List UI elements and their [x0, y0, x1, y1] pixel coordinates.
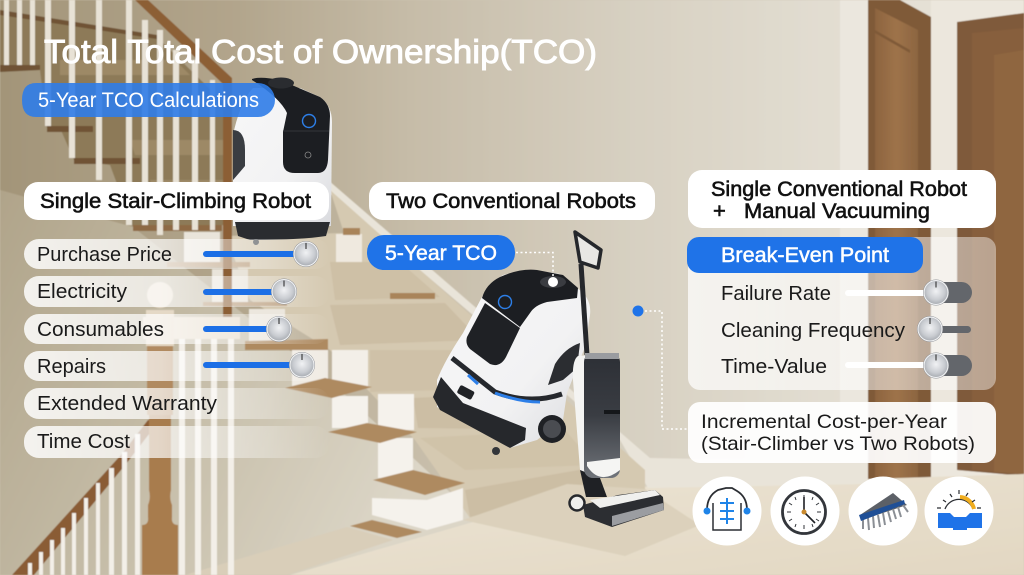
row: Extended Warranty [24, 388, 330, 419]
white risers and wood step noses [133, 225, 465, 538]
icon: brush roller [848, 476, 918, 546]
text box: incremental cost-per-year [688, 402, 996, 463]
heading: Single Conventional Robot + Manual Vacuuming: + Manual Vacuuming [713, 200, 930, 223]
right door [957, 13, 1024, 476]
heading: Two Conventional Robots: Two Conventional Robots [386, 190, 636, 213]
callout line: 5-Year TCO to robot [516, 252, 558, 287]
heading: Two Conventional Robots [369, 182, 655, 220]
heading: Single Conventional Robot + Manual Vacuuming [688, 170, 996, 228]
upper handrail [135, 0, 232, 318]
icon: clock [770, 476, 840, 546]
row: Purchase Price [24, 239, 330, 269]
pill: 5-Year TCO [367, 235, 515, 270]
robot: stair-climbing robot at top of stairs [233, 78, 332, 245]
pill: 5-Year TCO Calculations [22, 83, 275, 117]
hallway floor [270, 474, 1024, 575]
upper stairs with carpet [0, 13, 226, 227]
wall between doors [931, 0, 1024, 482]
right wall column [840, 0, 868, 482]
pill: 5-Year TCO: 5-Year TCO [385, 241, 497, 265]
icon: house with breaker [692, 476, 762, 546]
robot: stair-climbing robot on steps [433, 270, 590, 455]
row: Electricity: Electricity [37, 281, 127, 303]
row: Consumables: Consumables [37, 319, 164, 341]
lower handrail [12, 420, 160, 575]
text box: incremental cost-per-year: Incremental Cost-per-Year [701, 411, 948, 433]
heading: Single Conventional Robot + Manual Vacuuming: Single Conventional Robot [711, 178, 967, 201]
rug [463, 484, 700, 556]
pill: 5-Year TCO Calculations: 5-Year TCO Calculations [38, 89, 259, 112]
panel: break-even point [687, 237, 996, 390]
row: Electricity [24, 276, 330, 307]
newel post [142, 282, 240, 575]
row: Extended Warranty: Extended Warranty [37, 393, 217, 415]
panel: break-even point: Failure Rate [721, 283, 831, 305]
text box: incremental cost-per-year: (Stair-Climber vs Two Robots) [701, 433, 975, 455]
baseboard [328, 180, 868, 488]
callout line: blue dot to incremental cost [632, 306, 688, 429]
upper balusters [4, 0, 215, 235]
lower balusters [28, 338, 234, 575]
stick vacuum [570, 232, 664, 527]
title: Total Total Cost of Ownership(TCO) [44, 33, 597, 70]
heading: Single Stair-Climbing Robot: Single Stair-Climbing Robot [40, 190, 311, 213]
panel: break-even point: Break-Even Point [721, 244, 889, 267]
row: Time Cost: Time Cost [37, 431, 130, 453]
row: Repairs [24, 351, 330, 381]
panel: break-even point: Time-Value [721, 356, 827, 378]
bottom stair carpet [185, 527, 393, 575]
row: Time Cost [24, 426, 330, 458]
left door [868, 0, 931, 482]
panel: break-even point: Cleaning Frequency [721, 320, 905, 342]
row: Consumables [24, 314, 330, 344]
heading: Single Stair-Climbing Robot [24, 182, 329, 220]
carpet treads [226, 190, 645, 518]
row: Purchase Price: Purchase Price [37, 244, 172, 266]
icon: robot gauge [924, 476, 994, 546]
lower wall under stairs [0, 190, 480, 575]
row: Repairs: Repairs [37, 356, 106, 378]
